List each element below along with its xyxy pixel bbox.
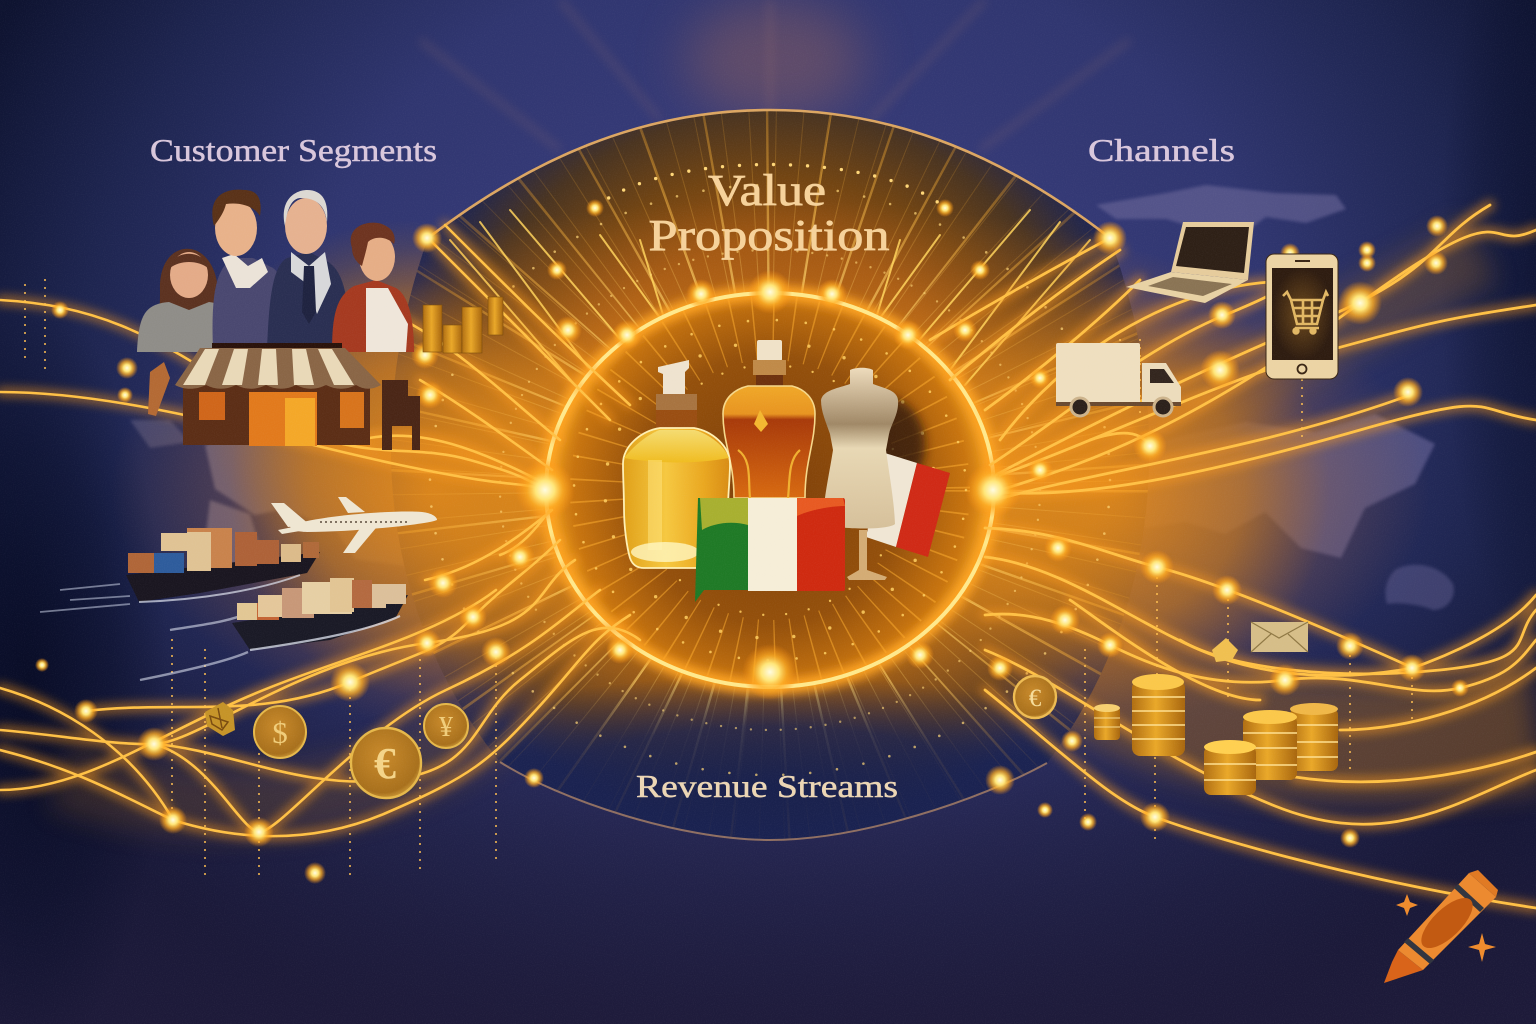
smartphone with cart: [1266, 254, 1338, 379]
delivery van: [1056, 343, 1181, 416]
coin stack: right back: [1290, 703, 1338, 771]
coin: dollar: [254, 706, 306, 758]
golden bands behind the lower flows: [60, 250, 1536, 803]
glowing nodes: [35, 199, 1469, 884]
coin stack: middle: [1243, 710, 1297, 780]
right flow lines: [930, 205, 1536, 908]
coin: small ornate: [205, 702, 235, 736]
coin: dollar: $: [272, 715, 288, 750]
mannequin: [821, 368, 898, 580]
coins and stacks, right: [1014, 674, 1338, 795]
flag, front: [695, 498, 845, 602]
eye outline: [428, 110, 1110, 840]
coins, left: [205, 702, 468, 798]
left flow lines: [0, 225, 640, 836]
coin stack: small: [1094, 704, 1120, 740]
perfume bottle, pump: [623, 360, 730, 568]
cargo ship, upper: [40, 528, 320, 612]
coin: other: [424, 704, 468, 748]
airplane: [271, 497, 437, 553]
bright rays in upper eye: [450, 210, 1090, 385]
heading: value proposition: [648, 166, 890, 260]
lower eye dark shade: [488, 682, 1070, 839]
left glow behind the flows: [200, 220, 620, 580]
wide central glow: [110, 200, 1430, 780]
vertical dotted data streams: [25, 280, 1412, 880]
heading: value proposition: Value: [708, 166, 826, 215]
coin stack: tall: [1132, 674, 1185, 756]
heading: customer segments: Customer Segments: [150, 132, 437, 168]
coin: euro: €: [374, 739, 396, 788]
person: young woman: [137, 249, 233, 352]
person: man in suit: [212, 190, 297, 350]
envelope: [1212, 622, 1308, 662]
person: older man: [267, 190, 350, 350]
world map, left: [130, 420, 555, 580]
crayon logo: [1384, 870, 1498, 983]
central eye panel: [391, 110, 1149, 840]
dotted rings: [430, 164, 1110, 775]
center products: [623, 340, 950, 602]
heading: channels: Channels: [1088, 132, 1235, 168]
world map, right: [1096, 185, 1454, 610]
person group: customers: [137, 190, 414, 352]
coin: euro: [351, 728, 421, 798]
perfume bottle, amber: [723, 340, 815, 498]
coin: other: ¥: [439, 712, 453, 743]
radial rays: [440, 160, 1100, 820]
person: woman in red: [332, 223, 414, 352]
icon: shopping cart: [1283, 292, 1328, 333]
cargo ship, lower: [140, 578, 408, 680]
side glows blending the eye edges: [230, 275, 1330, 705]
heading: value proposition: Proposition: [648, 211, 890, 260]
storefront: [148, 343, 420, 450]
coin: euro right: €: [1029, 685, 1042, 712]
heading: revenue streams: Revenue Streams: [636, 768, 898, 804]
laptop: [1126, 222, 1254, 303]
coin: euro right: [1014, 676, 1056, 718]
coin stacks near shop: [423, 297, 503, 353]
flag, back: [866, 453, 950, 557]
coin stack: front: [1204, 740, 1256, 795]
central core with ring: [546, 293, 994, 687]
